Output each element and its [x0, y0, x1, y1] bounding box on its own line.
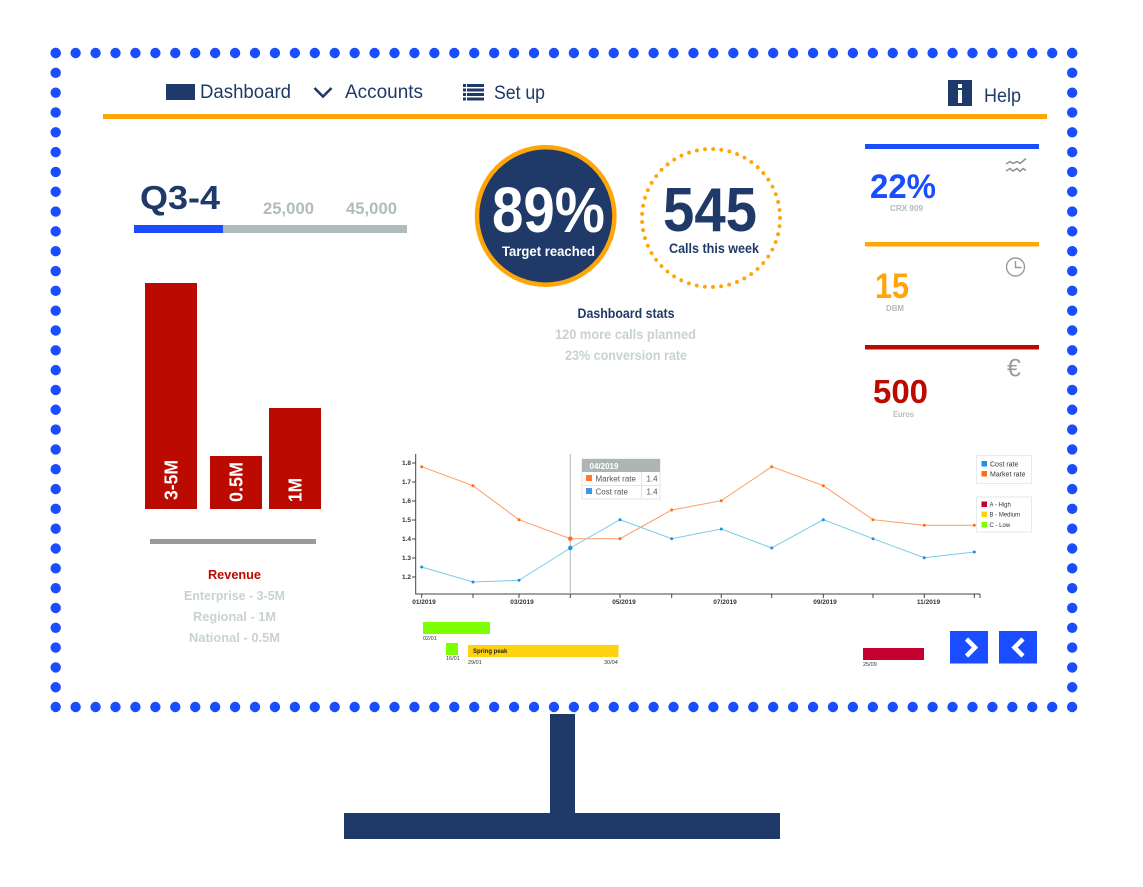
panel: KPI 500 Euros	[865, 345, 1039, 419]
chart tooltip: 1.4	[646, 474, 658, 484]
monitor stand	[344, 714, 780, 839]
x axis labels: 03/2019	[510, 599, 534, 606]
chart tooltip: Cost rate	[596, 488, 629, 496]
progress values	[263, 199, 397, 218]
x axis labels	[412, 599, 940, 606]
x axis labels: 07/2019	[713, 599, 737, 606]
x axis labels: 05/2019	[612, 599, 636, 606]
panel: Q3-4 progress	[134, 179, 407, 233]
stat circle: 545 calls this week: Calls this week	[669, 240, 759, 256]
icon: clock	[1006, 258, 1024, 276]
icon: wave lines	[1006, 158, 1026, 172]
panel: KPI 15 DBM: 15	[875, 267, 909, 306]
chart legend: rates	[976, 456, 1032, 484]
chart tooltip: Market rate	[596, 474, 637, 484]
panel: KPI 22% CRX 909	[865, 144, 1039, 213]
chart legend: rates: Market rate	[990, 472, 1026, 478]
timeline: event bars	[423, 622, 924, 668]
y axis labels: 1.3	[402, 555, 411, 562]
dashboard stats text: 120 more calls planned	[555, 327, 696, 342]
bar chart: revenue: 0.5M	[226, 462, 246, 502]
stat circle: 545 calls this week: 545	[663, 176, 757, 245]
revenue legend text: Regional - 1M	[193, 609, 276, 624]
nav item: Set up	[463, 83, 545, 104]
panel: KPI 500 Euros: 500	[873, 373, 928, 410]
timeline: event bars: Spring peak	[473, 649, 508, 655]
chart tooltip: 04/2019	[590, 462, 619, 471]
progress bar	[134, 225, 407, 233]
timeline: event bars: 02/01	[423, 636, 437, 642]
hover guide	[569, 454, 571, 594]
y axis labels: 1.8	[402, 460, 411, 467]
chart tooltip	[582, 459, 660, 499]
bar chart: revenue: 3-5M	[162, 460, 182, 500]
stat circle: 89% target reached: Target reached	[502, 243, 595, 259]
line chart: cost rate and market rate	[402, 454, 980, 606]
navigation divider	[103, 114, 1047, 119]
dashboard stats text: 23% conversion rate	[565, 348, 687, 363]
x axis labels: 01/2019	[412, 599, 436, 606]
y axis labels: 1.7	[402, 479, 411, 486]
nav item: Dashboard: Dashboard	[200, 82, 291, 103]
panel: KPI 500 Euros: Euros	[893, 410, 915, 419]
revenue legend text: Revenue	[208, 567, 261, 582]
chart legend: priority: A - High	[990, 502, 1011, 508]
panel: KPI 22% CRX 909: CRX 909	[890, 204, 924, 213]
progress values: 25,000	[263, 199, 314, 218]
chart legend: priority: B - Medium	[990, 512, 1020, 518]
panel: KPI 15 DBM	[865, 242, 1039, 313]
y axis labels	[402, 460, 411, 581]
stat circle: 89% target reached: 89%	[492, 174, 605, 246]
x axis labels: 11/2019	[917, 599, 940, 606]
revenue legend text	[184, 567, 285, 645]
y axis labels: 1.4	[402, 536, 411, 543]
bar chart: revenue: 1M	[286, 478, 306, 502]
heading: Q3-4: Q3-4	[140, 179, 221, 216]
nav item: Accounts: Accounts	[345, 82, 423, 103]
chart tooltip: 1.4	[646, 488, 658, 496]
timeline: event bars: 29/01	[468, 660, 482, 666]
panel: KPI 15 DBM: DBM	[886, 304, 904, 313]
chart legend: priority	[976, 497, 1032, 532]
dashboard stats text	[555, 306, 696, 363]
stat circle: 545 calls this week	[642, 149, 780, 287]
chart legend: rates: Cost rate	[990, 462, 1019, 468]
button: next	[950, 631, 988, 664]
series: market rate	[420, 465, 976, 541]
dashboard stats text: Dashboard stats	[578, 306, 674, 321]
bar chart: revenue	[145, 283, 321, 544]
navigation bar	[166, 80, 1021, 107]
y axis labels: 1.2	[402, 574, 411, 581]
chart legend: priority: C - Low	[990, 523, 1011, 529]
y axis labels: 1.5	[402, 517, 411, 524]
x axis labels: 09/2019	[813, 599, 837, 606]
icon: euro sign: €	[1007, 354, 1021, 382]
panel: KPI 22% CRX 909: 22%	[870, 168, 936, 206]
timeline: event bars: 25/09	[863, 662, 877, 668]
nav item: Help	[948, 80, 1021, 107]
nav item: Help: Help	[984, 86, 1021, 107]
stat circle: 89% target reached	[477, 147, 614, 285]
button: previous	[999, 631, 1037, 664]
revenue legend text: Enterprise - 3-5M	[184, 588, 285, 603]
series: cost rate	[420, 518, 976, 584]
y axis labels: 1.6	[402, 498, 411, 505]
chart axes	[412, 454, 980, 598]
timeline: event bars: 30/04	[604, 660, 618, 666]
nav item: Set up: Set up	[494, 83, 545, 104]
revenue legend text: National - 0.5M	[189, 630, 280, 645]
progress values: 45,000	[346, 199, 397, 218]
monitor frame: dotted screen border	[56, 53, 1072, 707]
timeline: event bars: 16/01	[446, 656, 460, 662]
